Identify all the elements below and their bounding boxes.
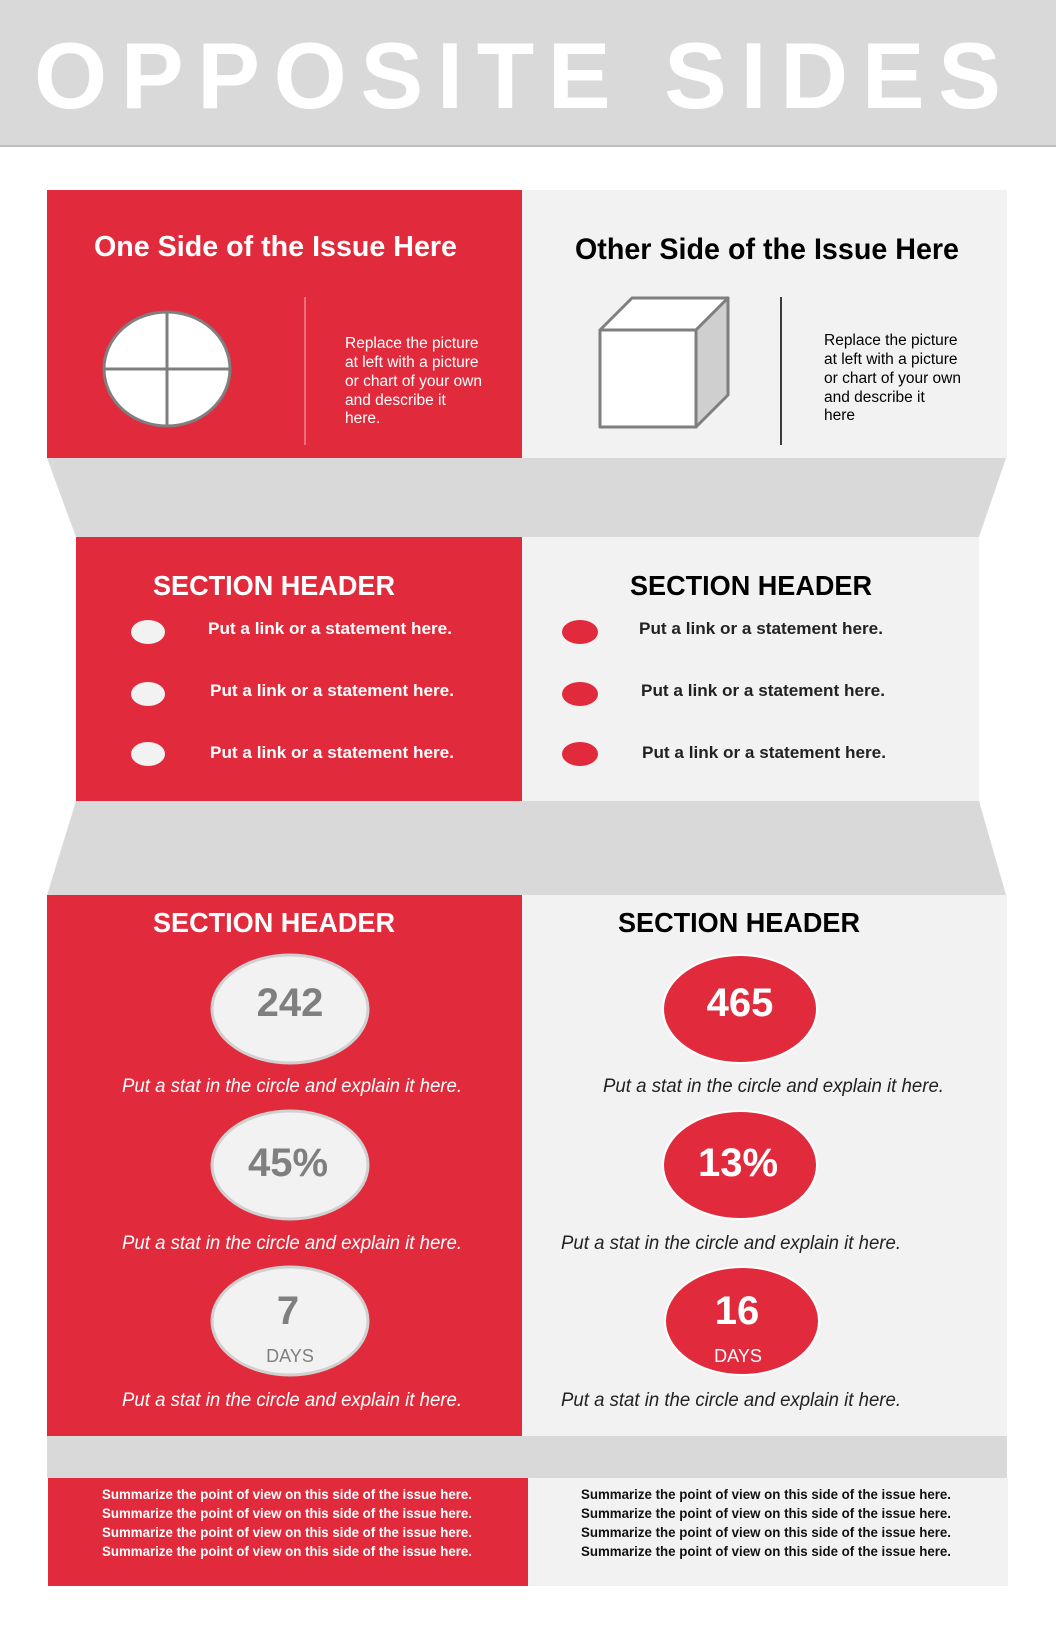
list: right statements: Put a link or a statement here. <box>641 682 885 700</box>
stat: 13%: 13% <box>698 1141 778 1185</box>
panel: middle left <box>76 537 522 801</box>
header band <box>0 0 1056 147</box>
panel: top left <box>47 190 522 458</box>
caption: Put a stat in the circle and explain it here. <box>122 1233 462 1254</box>
text block: left description: at left with a picture <box>345 354 479 371</box>
stat: 7 days <box>212 1267 368 1375</box>
panel: summary left: Summarize the point of view on this side of the issue here. <box>102 1525 472 1540</box>
text block: right description: here <box>824 407 855 424</box>
text block: left description: or chart of your own <box>345 373 482 390</box>
stat: 16 days <box>665 1267 819 1375</box>
text block: left description: and describe it <box>345 392 447 409</box>
text block: right description: Replace the picture <box>824 332 958 349</box>
stat: 16 days: DAYS <box>714 1346 762 1366</box>
list: left statements: Put a link or a statement here. <box>210 744 454 762</box>
panel: summary right: Summarize the point of view on this side of the issue here. <box>581 1544 951 1559</box>
panel: middle right <box>522 537 979 801</box>
list: right statements: Put a link or a statement here. <box>642 744 886 762</box>
panel: stats right <box>522 895 1007 1436</box>
stat: 45%: 45% <box>248 1141 328 1185</box>
text block: left description <box>345 335 482 427</box>
stat: 465: 465 <box>707 981 773 1025</box>
panel: summary left: Summarize the point of view on this side of the issue here. <box>102 1506 472 1521</box>
stat: 7 days: DAYS <box>266 1346 314 1366</box>
heading: stats left: SECTION HEADER <box>153 907 395 938</box>
stat: 465 <box>663 955 817 1063</box>
stat: 7 days: 7 <box>277 1289 299 1333</box>
caption: Put a stat in the circle and explain it here. <box>122 1390 462 1411</box>
fold band 2 <box>47 801 1006 895</box>
panel: top right <box>522 190 1007 458</box>
fold band 1 <box>47 458 1006 537</box>
caption: Put a stat in the circle and explain it here. <box>603 1076 944 1097</box>
panel: summary left: Summarize the point of view on this side of the issue here. <box>102 1487 472 1502</box>
panel: stats left <box>47 895 522 1436</box>
caption: Put a stat in the circle and explain it here. <box>122 1076 462 1097</box>
text block: right description: and describe it <box>824 389 926 406</box>
grey band <box>47 1436 1007 1478</box>
panel: summary right <box>528 1478 1008 1586</box>
list: left statements: Put a link or a statement here. <box>208 620 452 638</box>
icon: cube <box>600 298 728 427</box>
heading: stats right: SECTION HEADER <box>618 907 860 938</box>
panel: summary right: Summarize the point of view on this side of the issue here. <box>581 1525 951 1540</box>
heading: one side: One Side of the Issue Here <box>94 231 457 263</box>
list: right statements: Put a link or a statement here. <box>639 620 883 638</box>
caption: Put a stat in the circle and explain it here. <box>561 1233 901 1254</box>
heading: section header left: SECTION HEADER <box>153 570 395 601</box>
text block: right description <box>824 332 961 424</box>
stat: 242: 242 <box>257 981 323 1025</box>
panel: summary right: Summarize the point of view on this side of the issue here. <box>581 1506 951 1521</box>
panel: summary right: Summarize the point of view on this side of the issue here. <box>581 1487 951 1502</box>
caption: Put a stat in the circle and explain it here. <box>561 1390 901 1411</box>
heading: section header right: SECTION HEADER <box>630 570 872 601</box>
icon: pie chart <box>104 312 230 426</box>
text block: left description: Replace the picture <box>345 335 479 352</box>
stat: 242 <box>212 955 368 1063</box>
list: left statements: Put a link or a statement here. <box>210 682 454 700</box>
title: OPPOSITE SIDES <box>34 23 1001 128</box>
stat: 16 days: 16 <box>715 1289 759 1333</box>
text block: left description: here. <box>345 410 380 427</box>
stat: 45% <box>212 1111 368 1219</box>
text block: right description: or chart of your own <box>824 370 961 387</box>
panel: summary left: Summarize the point of view on this side of the issue here. <box>102 1544 472 1559</box>
heading: other side: Other Side of the Issue Here <box>575 233 959 266</box>
panel: summary left <box>48 1478 528 1586</box>
list: left statements <box>131 620 454 766</box>
text block: right description: at left with a picture <box>824 351 958 368</box>
list: right statements <box>562 620 886 766</box>
stat: 13% <box>663 1111 817 1219</box>
